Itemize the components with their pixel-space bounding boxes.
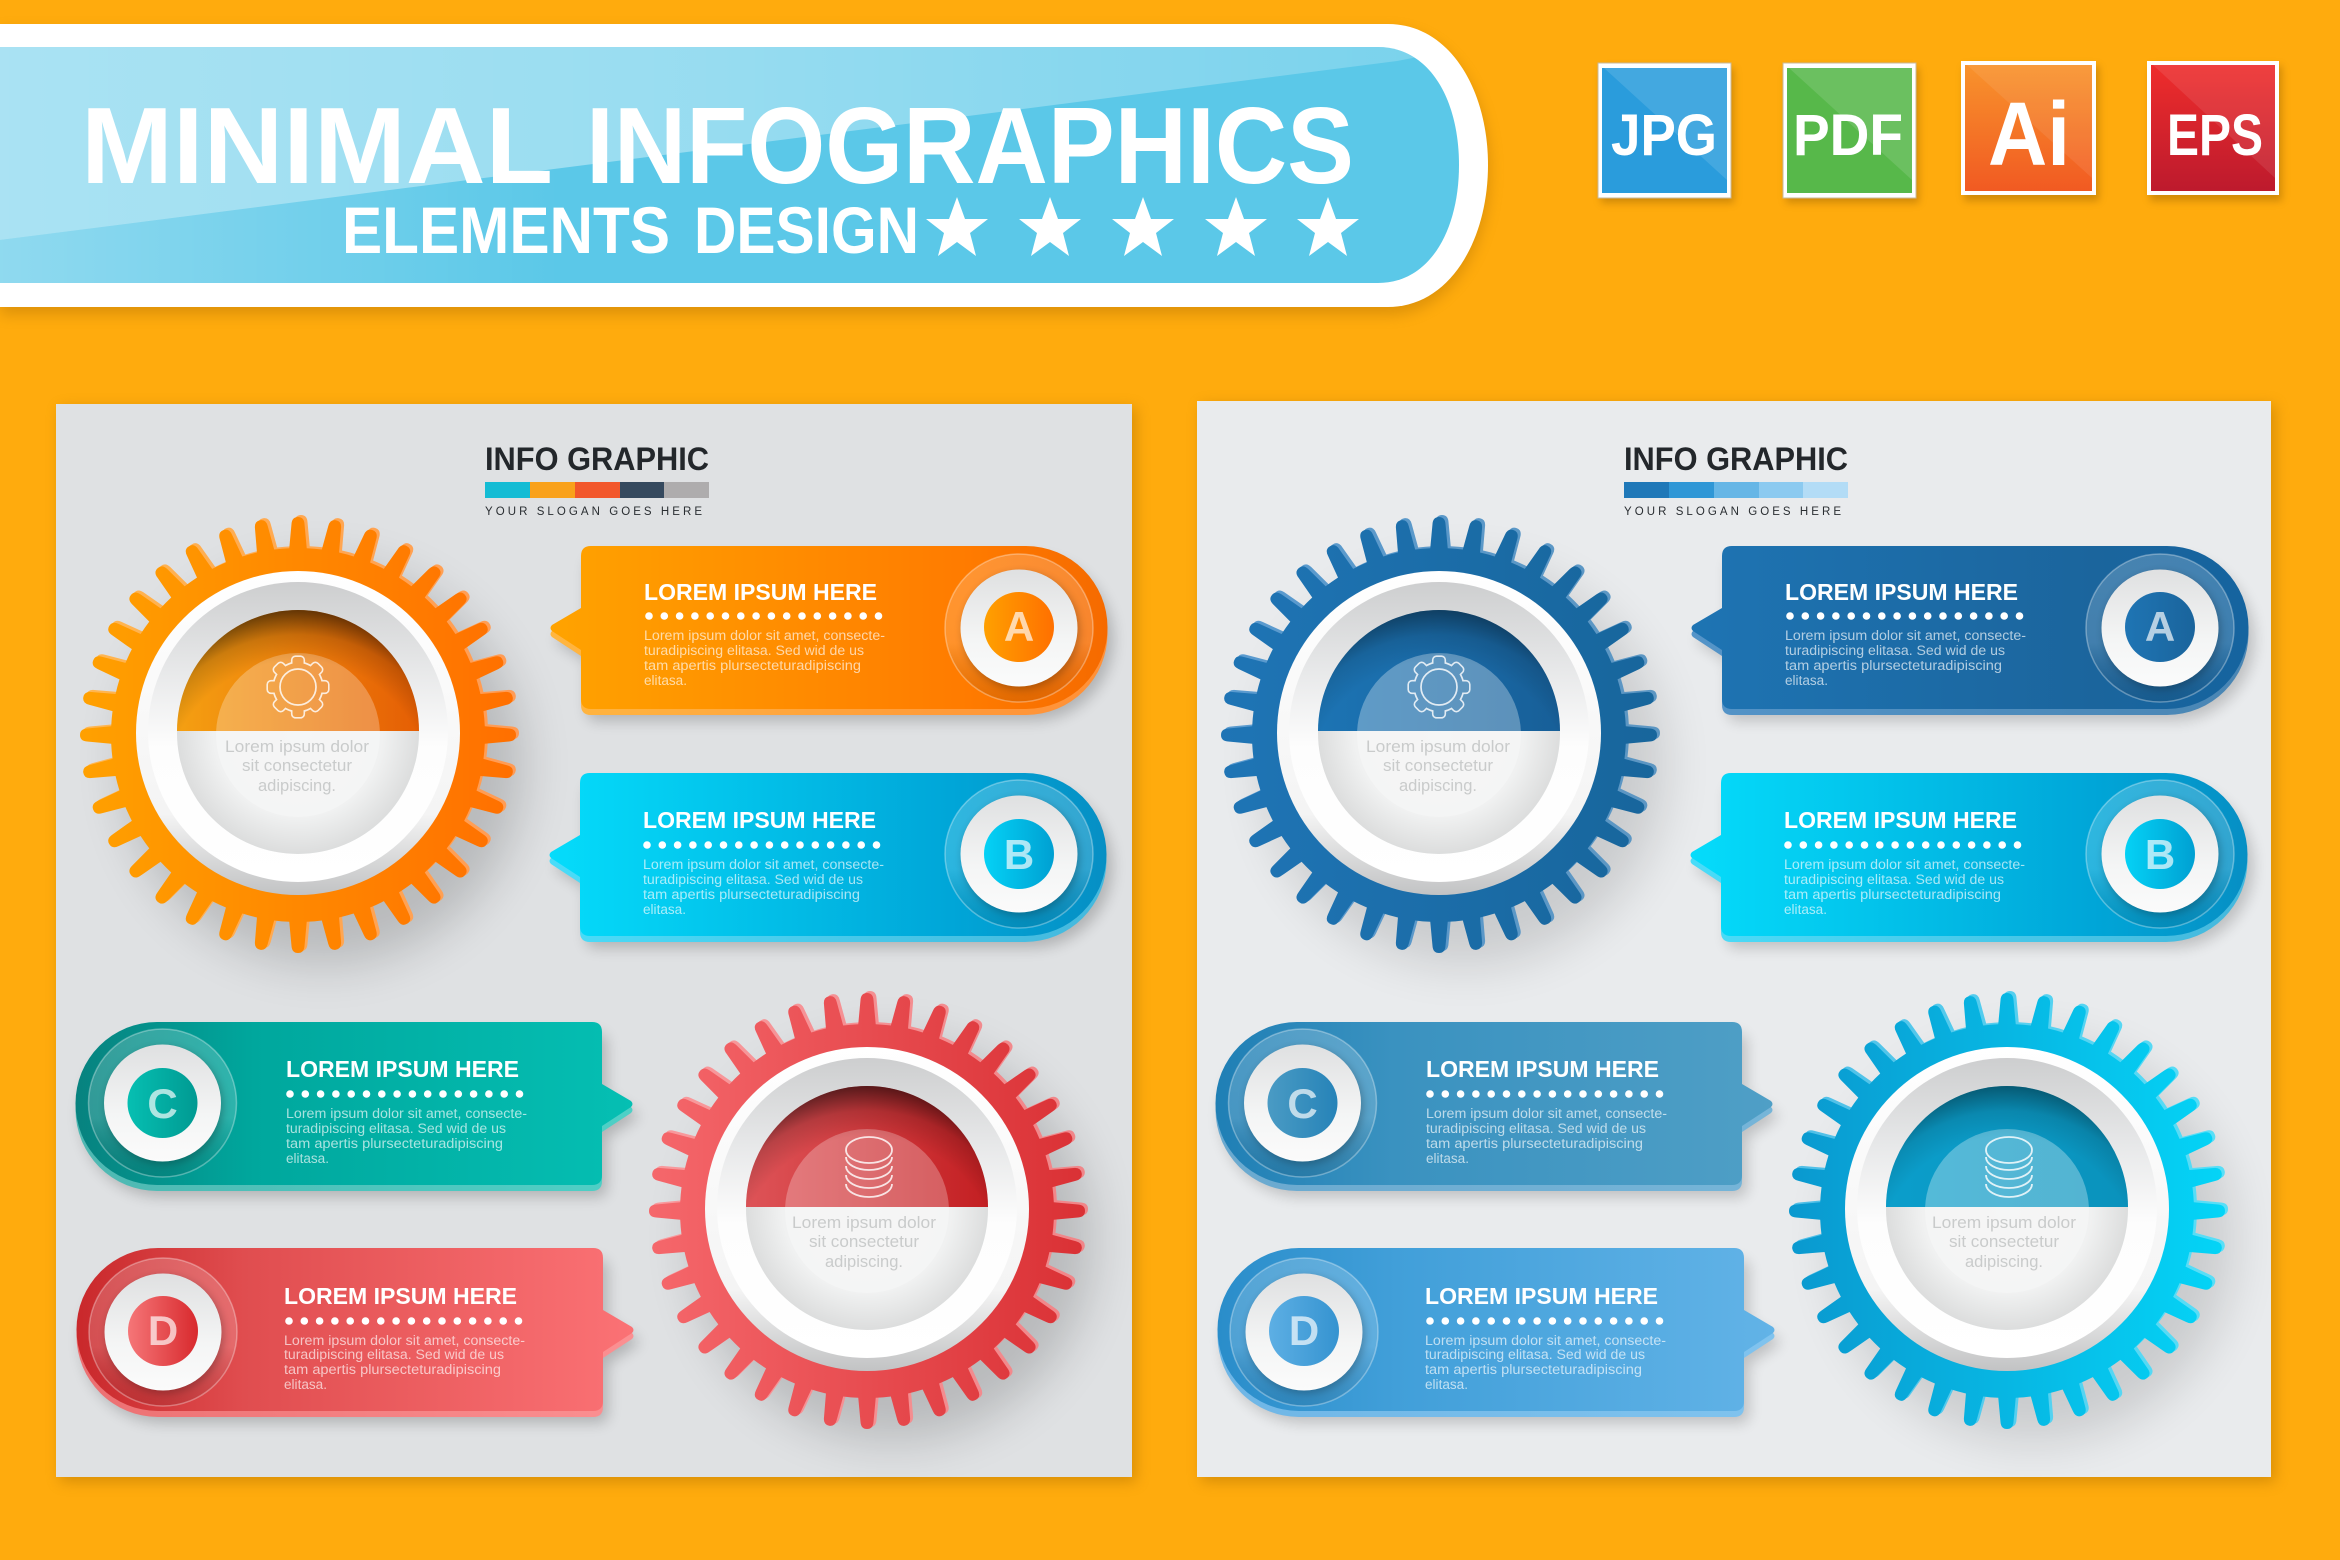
banner subtitle: DESIGN: [694, 193, 919, 267]
badge: Ai: Ai: [1988, 85, 2070, 185]
card D body: [284, 1333, 525, 1392]
gear centre text: adipiscing.: [1965, 1252, 2043, 1271]
badge: EPS: [2147, 61, 2282, 201]
gear centre text: [792, 1213, 936, 1271]
gear centre text: [1932, 1213, 2076, 1271]
card C letter badge: [88, 1029, 236, 1177]
panel: right blue version: [1197, 401, 2275, 1482]
card B dots: [643, 841, 880, 849]
card A body: elitasa.: [644, 673, 687, 688]
card B letter badge: [945, 780, 1093, 928]
card B body: [1784, 857, 2025, 917]
card B (cyan): [1690, 773, 2254, 948]
badge: Ai: [1961, 61, 2099, 201]
card D body: elitasa.: [284, 1377, 327, 1392]
card A body: elitasa.: [1785, 673, 1828, 688]
banner: [0, 24, 1490, 315]
gear centre: coloured half: [1318, 610, 1560, 731]
card B letter badge: [2086, 780, 2234, 928]
banner subtitle: ELEMENTS: [342, 193, 670, 267]
card B letter badge: B: [1004, 831, 1034, 878]
card C title: LOREM IPSUM HERE: [286, 1056, 519, 1082]
card C (steel blue): [1216, 1022, 1778, 1197]
card D (sky blue): [1218, 1248, 1780, 1423]
gear: orange: [68, 503, 531, 965]
card D letter badge: D: [1289, 1307, 1319, 1354]
card C body: Lorem ipsum dolor sit amet, consecte-: [286, 1106, 527, 1121]
heading: info graphic: [1624, 441, 1848, 518]
card A title: LOREM IPSUM HERE: [644, 579, 877, 605]
banner subtitle: [342, 193, 919, 267]
card A letter badge: [945, 554, 1093, 702]
card B body: tam apertis plursecteturadipiscing: [1784, 887, 2001, 902]
icon: gear: [258, 647, 338, 727]
colour strip: [485, 482, 709, 498]
gear centre text: Lorem ipsum dolor: [1366, 737, 1510, 756]
card C body: turadipiscing elitasa. Sed wid de us: [1426, 1121, 1646, 1136]
card B title: LOREM IPSUM HERE: [1784, 807, 2017, 833]
card A: [550, 546, 1114, 721]
banner title: INFOGRAPHICS: [586, 85, 1354, 207]
heading: info graphic: INFO GRAPHIC: [1624, 441, 1848, 477]
badge: PDF: PDF: [1793, 103, 1903, 168]
card D dots: [285, 1317, 522, 1325]
card C dots: [1426, 1090, 1663, 1098]
badge: JPG: JPG: [1611, 103, 1717, 168]
card A body: tam apertis plursecteturadipiscing: [1785, 658, 2002, 673]
gear: dark blue: [1209, 503, 1672, 965]
card A body: turadipiscing elitasa. Sed wid de us: [644, 643, 864, 658]
gear centre text: [225, 737, 369, 795]
card B dots: [1784, 841, 2021, 849]
card B title: LOREM IPSUM HERE: [643, 807, 876, 833]
card D letter badge: D: [148, 1307, 178, 1354]
colour strip: [1624, 482, 1848, 498]
card B body: turadipiscing elitasa. Sed wid de us: [1784, 872, 2004, 887]
card A body: tam apertis plursecteturadipiscing: [644, 658, 861, 673]
gear centre text: Lorem ipsum dolor: [1932, 1213, 2076, 1232]
card C body: turadipiscing elitasa. Sed wid de us: [286, 1121, 506, 1136]
slogan: YOUR SLOGAN GOES HERE: [485, 506, 702, 518]
card A letter badge: [2086, 554, 2234, 702]
heading: info graphic: [485, 441, 709, 518]
card B body: [643, 857, 884, 917]
gear centre text: sit consectetur: [1949, 1232, 2059, 1251]
panel: left colourful version: [56, 404, 1136, 1482]
badge: PDF: [1783, 63, 1919, 203]
card D body: [1425, 1333, 1666, 1392]
card D letter badge: [89, 1258, 237, 1406]
card C body: tam apertis plursecteturadipiscing: [1426, 1136, 1643, 1151]
card D body: elitasa.: [1425, 1377, 1468, 1392]
card C dots: [286, 1090, 523, 1098]
card C body: Lorem ipsum dolor sit amet, consecte-: [1426, 1106, 1667, 1121]
card C letter badge: C: [147, 1080, 178, 1127]
gear centre: coloured half: [1886, 1086, 2128, 1207]
card A (blue): [1692, 546, 2254, 721]
card D body: tam apertis plursecteturadipiscing: [284, 1362, 501, 1377]
card D dots: [1426, 1317, 1663, 1325]
banner title: [81, 85, 1354, 207]
gear centre text: Lorem ipsum dolor: [225, 737, 369, 756]
card A letter badge: A: [1004, 603, 1034, 650]
gear: red: [637, 979, 1100, 1441]
card B: [550, 773, 1112, 948]
card D title: LOREM IPSUM HERE: [1425, 1283, 1658, 1309]
icon: gear: [1399, 647, 1479, 727]
gear centre text: Lorem ipsum dolor: [792, 1213, 936, 1232]
icon: database: [1986, 1137, 2032, 1197]
card A body: [1785, 628, 2026, 688]
card C letter badge: C: [1287, 1080, 1318, 1127]
gear: cyan: [1777, 979, 2240, 1441]
gear centre text: [1366, 737, 1510, 795]
gear centre text: sit consectetur: [242, 756, 352, 775]
card C title: LOREM IPSUM HERE: [1426, 1056, 1659, 1082]
five stars: [926, 197, 1359, 256]
card A dots: [645, 612, 882, 620]
card A body: Lorem ipsum dolor sit amet, consecte-: [1785, 628, 2026, 643]
card C body: [1426, 1106, 1667, 1166]
card C body: tam apertis plursecteturadipiscing: [286, 1136, 503, 1151]
gear centre text: adipiscing.: [1399, 776, 1477, 795]
card B body: elitasa.: [1784, 902, 1827, 917]
card D: [76, 1248, 638, 1423]
slogan: YOUR SLOGAN GOES HERE: [1624, 506, 1841, 518]
card B body: Lorem ipsum dolor sit amet, consecte-: [643, 857, 884, 872]
gear centre text: adipiscing.: [258, 776, 336, 795]
banner title: MINIMAL: [81, 85, 553, 207]
card D letter badge: [1230, 1258, 1378, 1406]
card C body: elitasa.: [286, 1151, 329, 1166]
card A dots: [1786, 612, 2023, 620]
heading: info graphic: INFO GRAPHIC: [485, 441, 709, 477]
gear centre text: sit consectetur: [1383, 756, 1493, 775]
card A title: LOREM IPSUM HERE: [1785, 579, 2018, 605]
card C body: [286, 1106, 527, 1166]
card C letter badge: [1228, 1029, 1376, 1177]
card B body: elitasa.: [643, 902, 686, 917]
card D title: LOREM IPSUM HERE: [284, 1283, 517, 1309]
gear centre: coloured half: [177, 610, 419, 731]
card C body: elitasa.: [1426, 1151, 1469, 1166]
card D body: turadipiscing elitasa. Sed wid de us: [1425, 1347, 1645, 1362]
card A body: turadipiscing elitasa. Sed wid de us: [1785, 643, 2005, 658]
gear centre text: sit consectetur: [809, 1232, 919, 1251]
gear centre text: adipiscing.: [825, 1252, 903, 1271]
card A body: [644, 628, 885, 688]
card D body: Lorem ipsum dolor sit amet, consecte-: [1425, 1333, 1666, 1348]
badge: JPG: [1598, 63, 1734, 203]
icon: database: [846, 1137, 892, 1197]
card D body: turadipiscing elitasa. Sed wid de us: [284, 1347, 504, 1362]
card B body: turadipiscing elitasa. Sed wid de us: [643, 872, 863, 887]
card B letter badge: B: [2145, 831, 2175, 878]
card C: [76, 1022, 638, 1197]
card A letter badge: A: [2145, 603, 2175, 650]
card D body: Lorem ipsum dolor sit amet, consecte-: [284, 1333, 525, 1348]
badge: EPS: EPS: [2167, 103, 2263, 168]
card B body: tam apertis plursecteturadipiscing: [643, 887, 860, 902]
card A body: Lorem ipsum dolor sit amet, consecte-: [644, 628, 885, 643]
gear centre: coloured half: [746, 1086, 988, 1207]
card D body: tam apertis plursecteturadipiscing: [1425, 1362, 1642, 1377]
card B body: Lorem ipsum dolor sit amet, consecte-: [1784, 857, 2025, 872]
